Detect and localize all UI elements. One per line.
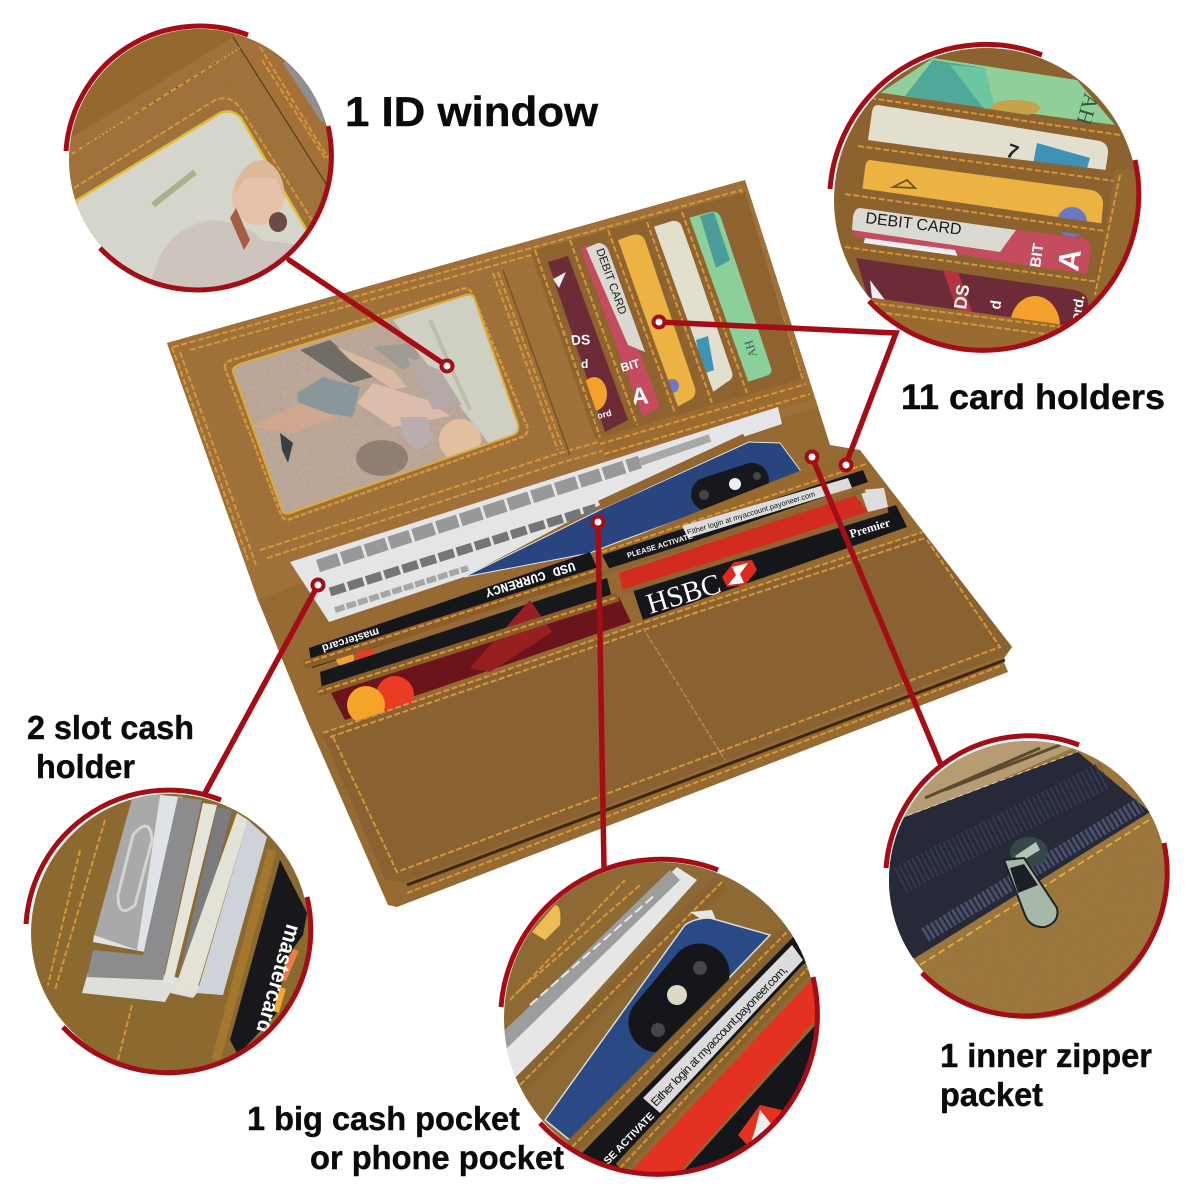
zoom: card holders: DS xyxy=(950,283,973,311)
zipper pull xyxy=(1010,837,1048,867)
card: debit xyxy=(580,243,660,417)
zipper tape xyxy=(885,752,1150,960)
label: cash or phone pocket: 1 big cash pocket xyxy=(247,1100,520,1137)
zoom: card holders: AH xyxy=(1071,91,1104,128)
stitch xyxy=(920,818,1152,965)
zoom: cash holder xyxy=(25,790,315,1080)
front pockets xyxy=(322,532,1012,893)
right edge xyxy=(1096,170,1136,298)
stitching xyxy=(70,48,240,155)
upper flap xyxy=(167,180,818,600)
right cards: Either login at myaccount.payoneer.com xyxy=(686,489,816,537)
zoom: zipper pocket xyxy=(885,735,1175,1023)
black mastercard xyxy=(230,860,307,1055)
HSBC logo xyxy=(722,560,757,587)
zoom: cash holder: mastercard xyxy=(251,922,306,1036)
ring arcs xyxy=(66,26,248,151)
leather divider xyxy=(596,455,870,562)
zoom: card holders: 7 xyxy=(1003,140,1021,165)
label: zipper pocket: packet xyxy=(940,1076,1043,1113)
divider seam xyxy=(503,270,570,455)
card slots panel xyxy=(535,192,812,458)
debit card xyxy=(852,229,1090,274)
card slots panel: DS xyxy=(571,331,591,348)
card slots panel: d xyxy=(581,357,588,371)
ring arcs xyxy=(886,736,1079,868)
ring arcs xyxy=(830,44,1042,189)
bottom white band xyxy=(82,972,223,1002)
card slots panel: AH xyxy=(741,338,760,359)
ID window with photo xyxy=(225,285,527,520)
strips xyxy=(870,97,1120,135)
photo: shorts xyxy=(297,377,360,417)
yellow card xyxy=(862,160,1103,226)
yellow card tip xyxy=(532,905,560,940)
leader: card holders xyxy=(654,316,896,470)
zoom: card holders: d xyxy=(987,299,1005,311)
left cards: USD CURRENCY xyxy=(483,558,577,600)
black band and label xyxy=(580,935,808,1180)
red and black card xyxy=(630,976,820,1172)
right cards: Premier xyxy=(848,515,892,541)
label: cash holder xyxy=(27,709,194,785)
label: zipper pocket: 1 inner zipper xyxy=(940,1037,1152,1074)
label: cash holder: 2 slot cash xyxy=(27,709,194,746)
bill: cream edge xyxy=(163,803,217,983)
photo xyxy=(76,110,307,280)
label: cash or phone pocket: or phone pocket xyxy=(310,1139,564,1176)
wallet body xyxy=(167,180,1012,907)
wallet xyxy=(167,180,1012,907)
label: cash holder: holder xyxy=(36,748,135,785)
mastercard logo xyxy=(376,676,414,714)
leader lines and markers xyxy=(205,260,941,868)
label: card holders: 11 card holders xyxy=(901,378,1165,417)
left cards: mastercard xyxy=(320,625,381,654)
phone xyxy=(545,918,770,1142)
zoom: card holders: DEBIT CARD xyxy=(865,210,962,239)
card: cream xyxy=(653,221,732,392)
left cards xyxy=(304,552,631,724)
card: green xyxy=(688,212,771,382)
zoom: card holders: ord. xyxy=(1067,294,1088,323)
white card xyxy=(868,105,1108,173)
zoom: card holders: A xyxy=(1052,247,1088,273)
slot base band xyxy=(598,378,812,458)
card: yellow xyxy=(618,235,695,407)
right cards: PLEASE ACTIVATE xyxy=(626,531,694,560)
zoom: card holders: BIT xyxy=(1027,242,1047,269)
leader: phone pocket xyxy=(592,516,604,868)
card slots panel: A xyxy=(630,382,650,411)
label: zipper pocket xyxy=(940,1037,1152,1113)
zoom: phone pocket: SE ACTIVATE xyxy=(602,1110,657,1167)
card: maroon xyxy=(548,256,628,432)
label: cash or phone pocket xyxy=(247,1100,564,1176)
right cards xyxy=(602,470,907,621)
photo: child xyxy=(337,347,407,390)
slot strips xyxy=(535,212,747,437)
tan top leather xyxy=(901,741,1072,823)
bill: patterned band xyxy=(87,797,202,980)
zoom: card holders xyxy=(830,44,1140,360)
green card xyxy=(880,58,1115,125)
bill: grey face xyxy=(93,795,160,950)
strip xyxy=(572,930,789,1147)
HSBC logo xyxy=(738,1105,782,1148)
strip above phone xyxy=(516,971,645,1084)
flap lower band xyxy=(260,382,806,550)
bill: white border xyxy=(93,795,183,953)
photo: trunk xyxy=(300,340,373,383)
zoom: phone pocket: Either login at myaccount.payoneer.com, xyxy=(648,963,790,1109)
ring arcs xyxy=(501,859,718,1007)
zoom: ID window xyxy=(64,24,334,292)
card slots panel: ord xyxy=(596,408,613,421)
maroon card xyxy=(856,258,1088,330)
card slots panel: BIT xyxy=(619,356,642,375)
right cards: HSBC xyxy=(643,568,725,621)
zoom: phone pocket xyxy=(500,859,820,1180)
phone xyxy=(464,442,803,577)
leader: cash xyxy=(205,580,324,793)
leader: zipper xyxy=(806,452,941,765)
leader: ID window xyxy=(289,260,452,372)
cash xyxy=(500,867,697,1090)
strip between cash and phone xyxy=(600,438,745,505)
photo background wall xyxy=(393,293,522,445)
cash xyxy=(290,407,782,622)
card slots panel: DEBIT CARD xyxy=(593,247,628,316)
label: ID window: 1 ID window xyxy=(345,88,598,135)
ring arcs xyxy=(26,790,221,924)
